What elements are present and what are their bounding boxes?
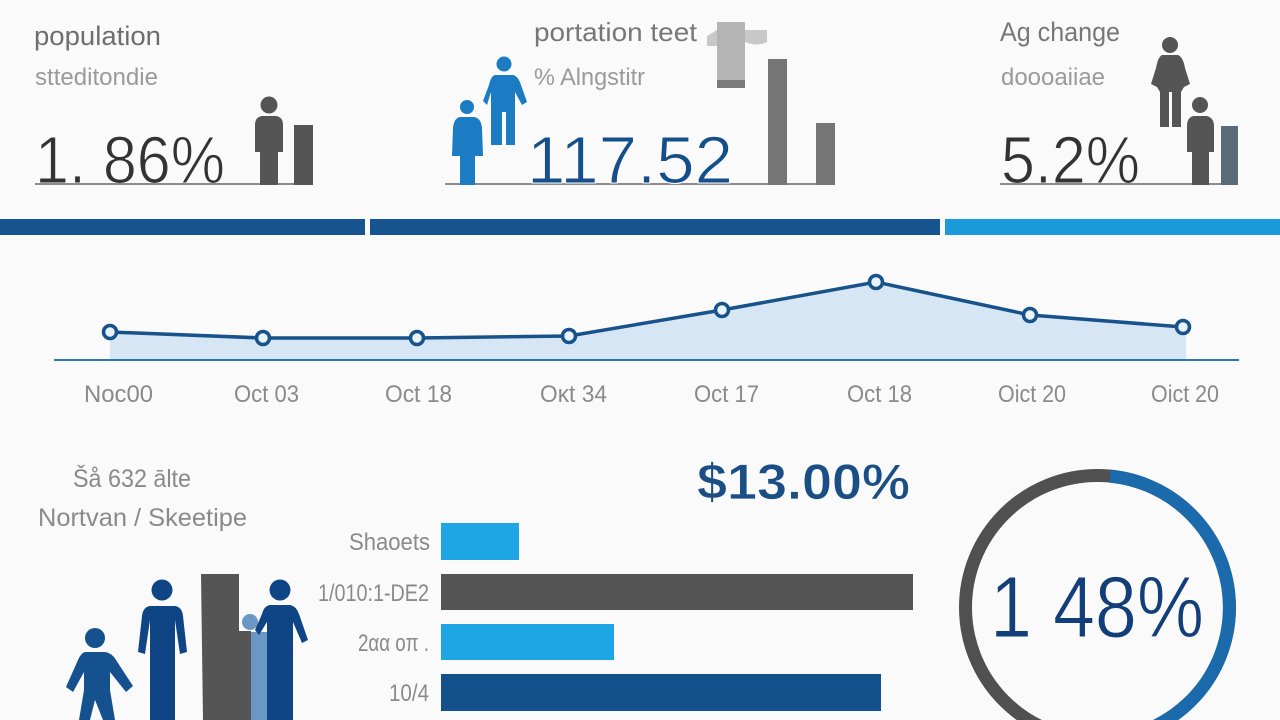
blue arc [1098,476,1229,720]
big number: 1.86%: 1. 86% [35,123,225,198]
panel: people illustration [38,464,308,720]
panel: age change stat [1000,17,1238,198]
bar labels: Shaoets [349,529,430,556]
panel: horizontal bar chart [318,454,913,711]
heading: Šå 632 ālte [73,464,191,493]
bars [441,523,519,560]
subheading: stteditondie [35,64,158,91]
small bar [1221,126,1238,185]
x axis labels: Oct 18 [385,381,452,408]
x axis labels: Oict 20 [998,381,1066,408]
x axis labels: Oct 17 [694,381,759,408]
icon: gray people [1151,37,1214,185]
x axis labels: Oict 20 [1151,381,1219,408]
light blue figure [242,614,268,720]
trend line [110,282,1183,338]
bar 2 [441,574,913,610]
value heading: $13.00%: $13.00% [697,454,910,510]
x axis labels: Noc00 [84,381,153,408]
icon: gray person [255,96,283,185]
small bar [294,125,313,185]
heading: portation teet [534,17,698,47]
tall gray bar [201,574,251,720]
donut gauge [966,476,1230,720]
subheading: Nortvan / Skeetipe [38,504,247,532]
tall blue person [138,580,187,720]
heading: age change: Ag change [1000,17,1120,47]
divider band [0,219,1280,235]
bar labels: 10/4 [389,680,429,707]
panel: population test stat [445,17,835,198]
data points [104,276,1190,344]
area fill [110,282,1186,359]
bar labels [318,529,430,707]
gray bars [768,59,835,185]
panel: population stat [34,21,313,198]
x axis labels: Oκt 34 [540,381,607,408]
x axis labels [84,381,1219,408]
decorative gray column [707,22,767,88]
small blue person [66,628,133,720]
blue person right [255,580,308,720]
bar 4 [441,674,881,711]
x axis labels: Oct 18 [847,381,912,408]
line chart [54,276,1239,408]
axis [54,359,1239,361]
gauge value: 1 48% [990,559,1204,656]
bar labels: 1/010:1-DE2 [318,580,429,607]
subheading: % Alngstitr [534,64,645,91]
bar 3 [441,624,614,660]
heading: population: population [34,21,161,51]
x axis labels: Oct 03 [234,381,299,408]
icon: blue people [452,56,527,185]
subheading: doooaiiae [1001,64,1105,91]
big number: 117.52: 117.52 [527,123,733,198]
big number: 5.2%: 5.2% [1001,123,1140,198]
bar labels: 2αα oπ . [358,630,429,657]
